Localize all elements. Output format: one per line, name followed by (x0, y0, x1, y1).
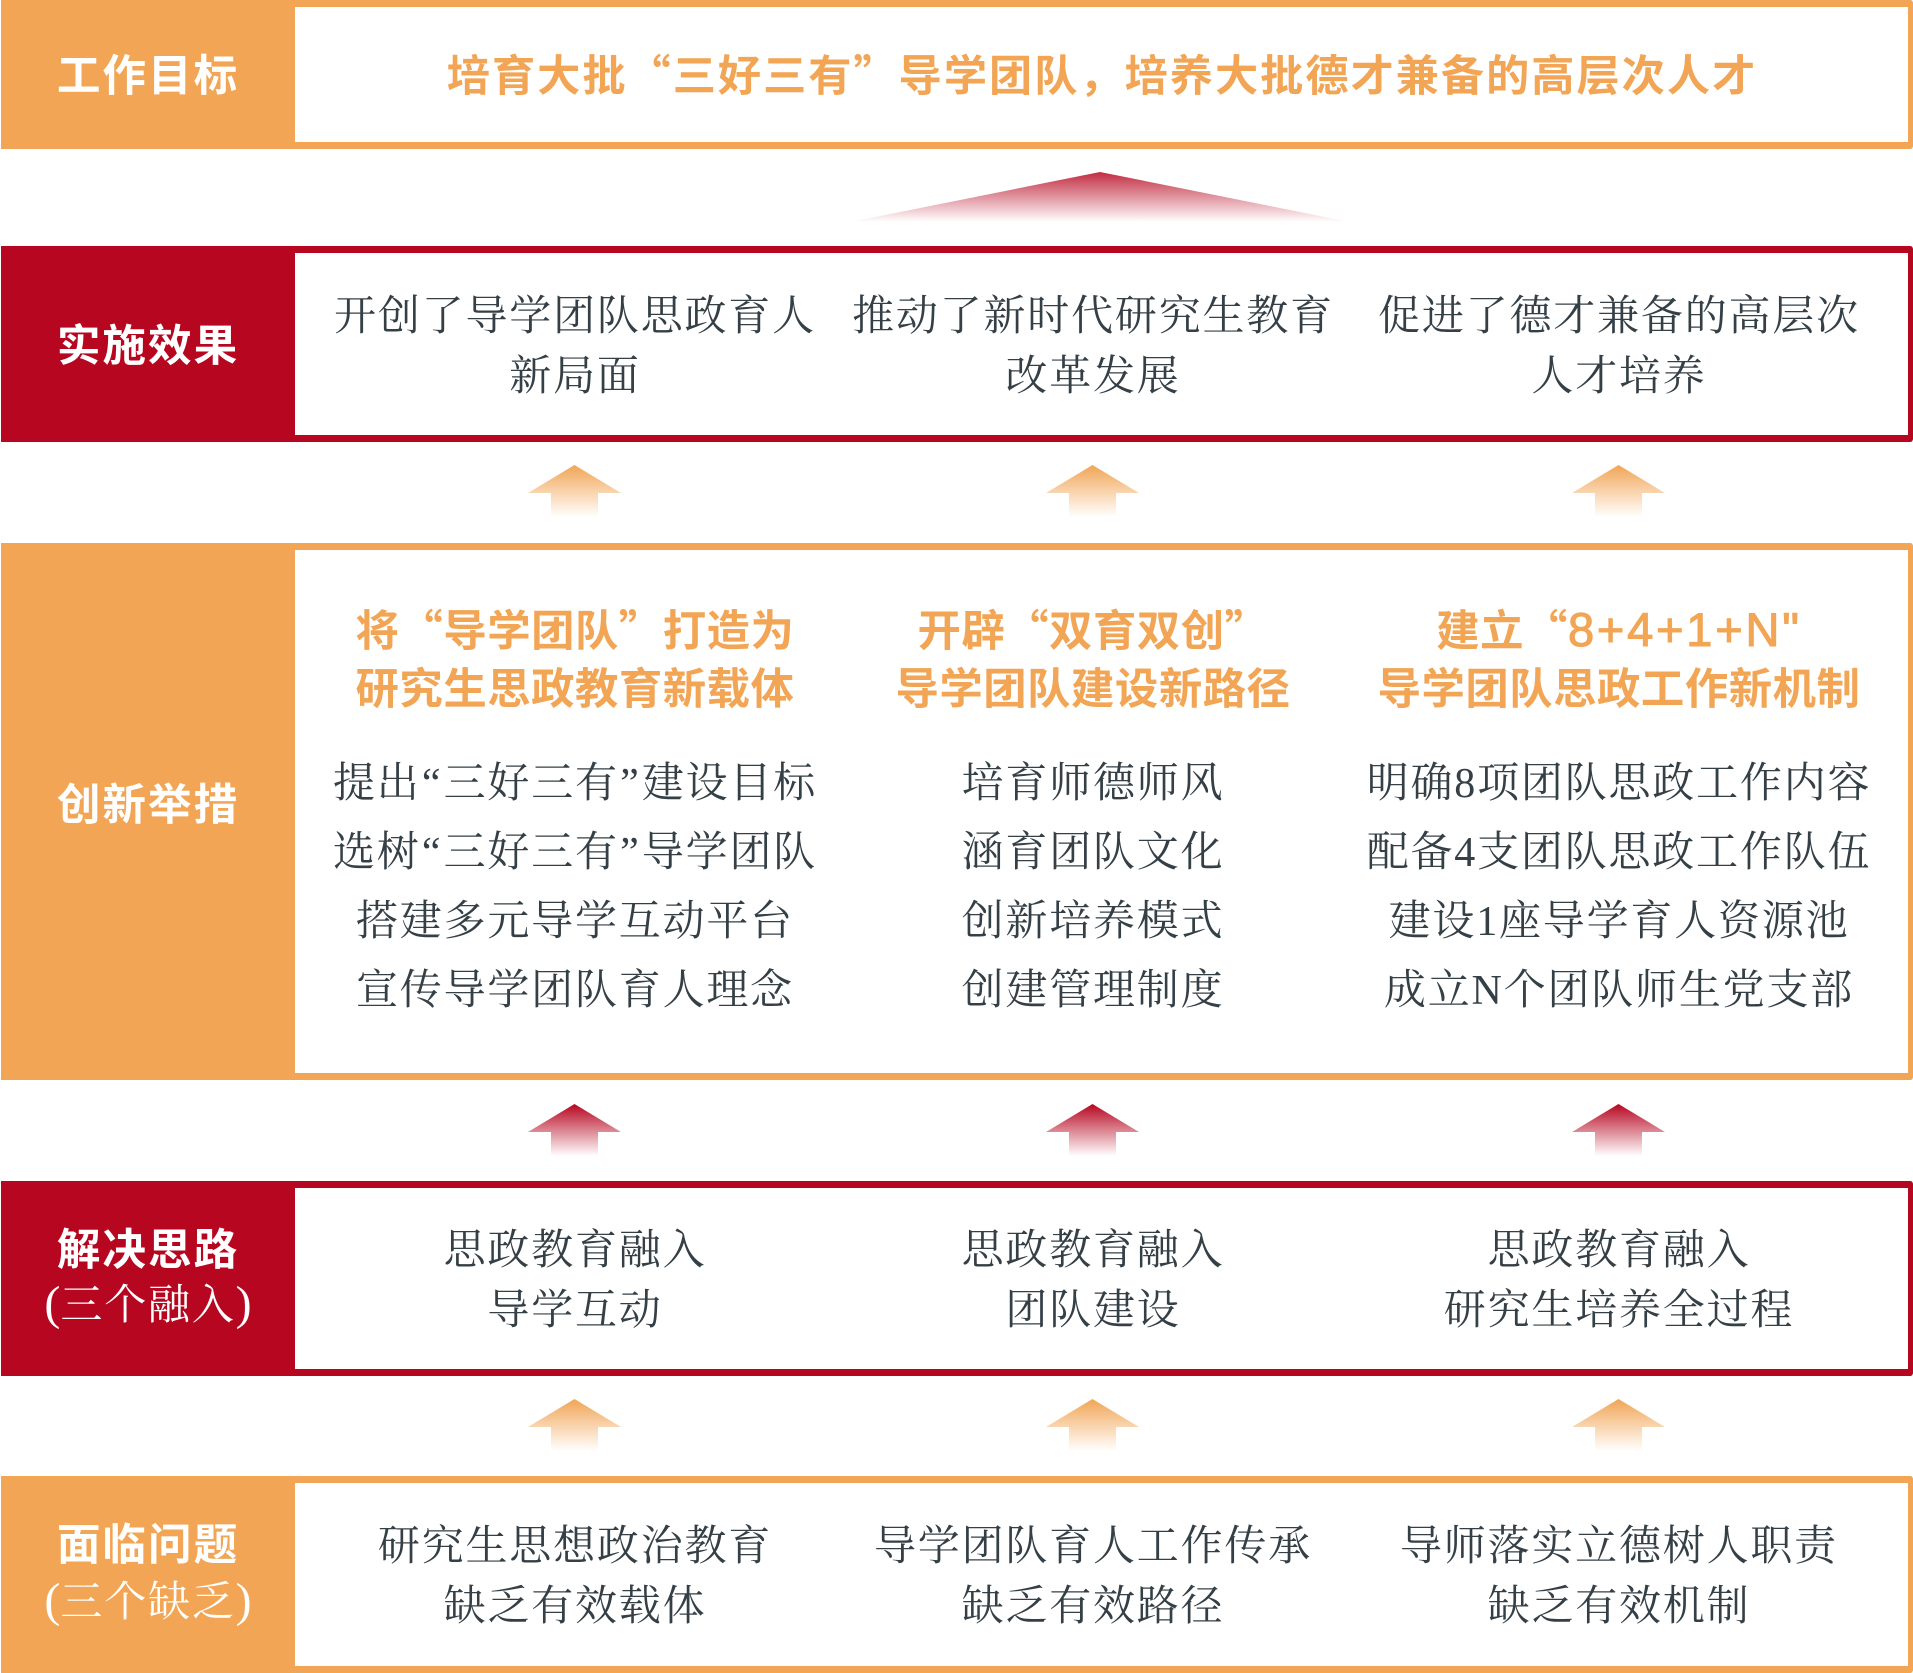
arrow: red column 1 (528, 1104, 621, 1154)
arrow: orange lower column 3 (1572, 1399, 1665, 1448)
column 3 list: 成立N个团队师生党支部 (1384, 968, 1854, 1014)
integration 1: 导学互动 (487, 1288, 663, 1334)
column 2 heading: 导学团队建设新路径 (895, 655, 1290, 717)
column 2 list: 创建管理制度 (962, 968, 1224, 1014)
result 3 (1378, 294, 1860, 400)
label: results: 实施效果 (57, 310, 239, 374)
arrow: orange column 3 (1572, 465, 1665, 514)
panel: results (1, 246, 1913, 442)
problem 1: 缺乏有效载体 (444, 1584, 706, 1630)
column 3 heading: 建立“8+4+1+N" (1436, 597, 1802, 659)
arrow: red column 3 (1572, 1104, 1665, 1154)
column 3 heading (1378, 597, 1860, 717)
column 1 list: 宣传导学团队育人理念 (356, 968, 794, 1014)
arrow: red column 2 (1046, 1104, 1139, 1154)
column 1 list: 提出“三好三有”建设目标 (333, 761, 817, 807)
integration 3: 思政教育融入 (1488, 1228, 1750, 1274)
problem 1 (378, 1524, 772, 1630)
arrow: orange lower column 2 (1046, 1399, 1139, 1448)
result 1 (334, 294, 816, 400)
problem 3: 缺乏有效机制 (1488, 1584, 1750, 1630)
integration 1: 思政教育融入 (444, 1228, 706, 1274)
column 1 list: 选树“三好三有”导学团队 (333, 830, 817, 876)
label: work goal: 工作目标 (57, 40, 239, 104)
result 2: 改革发展 (1005, 354, 1181, 400)
result 1: 新局面 (509, 354, 641, 400)
column 1 heading (356, 597, 794, 717)
column 2 list: 涵育团队文化 (962, 830, 1224, 876)
label: measures: 创新举措 (57, 769, 239, 833)
result 3: 人才培养 (1531, 354, 1707, 400)
problem 2: 缺乏有效路径 (962, 1584, 1224, 1630)
problem 3 (1400, 1524, 1838, 1630)
arrow: orange column 2 (1046, 465, 1139, 514)
integration 1 (444, 1228, 706, 1334)
column 3 list: 建设1座导学育人资源池 (1389, 899, 1849, 945)
panel: solution approach (1, 1181, 1913, 1376)
column 3 list (1367, 761, 1871, 1014)
column 1 heading: 将“导学团队”打造为 (356, 597, 794, 659)
panel: problems faced (1, 1476, 1913, 1673)
column 2 heading: 开辟“双育双创” (917, 597, 1269, 659)
column 1 list: 搭建多元导学互动平台 (356, 899, 794, 945)
column 3 heading: 导学团队思政工作新机制 (1378, 655, 1860, 717)
column 3 list: 配备4支团队思政工作队伍 (1367, 830, 1871, 876)
label: problems faced: 面临问题 (57, 1509, 239, 1573)
panel: work goal (1, 0, 1913, 149)
arrow: orange column 1 (528, 465, 621, 514)
integration 2: 团队建设 (1005, 1288, 1181, 1334)
arrow: large red up arrow (862, 172, 1338, 220)
sub label: three lacks: (三个缺乏) (44, 1574, 252, 1627)
problem 3: 导师落实立德树人职责 (1400, 1524, 1838, 1570)
integration 2 (962, 1228, 1224, 1334)
integration 2: 思政教育融入 (962, 1228, 1224, 1274)
result 2 (852, 294, 1334, 400)
goal statement: 培育大批“三好三有”导学团队，培养大批德才兼备的高层次人才 (447, 42, 1757, 104)
result 2: 推动了新时代研究生教育 (852, 294, 1334, 340)
sub label: three integrations: (三个融入) (44, 1277, 252, 1330)
problem 2: 导学团队育人工作传承 (874, 1524, 1312, 1570)
problem 2 (874, 1524, 1312, 1630)
arrow: orange lower column 1 (528, 1399, 621, 1448)
integration 3: 研究生培养全过程 (1444, 1288, 1794, 1334)
column 2 heading (895, 597, 1290, 717)
integration 3 (1444, 1228, 1794, 1334)
label: solution approach: 解决思路 (57, 1214, 239, 1278)
column 2 list: 培育师德师风 (962, 761, 1224, 807)
result 1: 开创了导学团队思政育人 (334, 294, 816, 340)
panel: innovative measures (1, 543, 1913, 1080)
problem 1: 研究生思想政治教育 (378, 1524, 772, 1570)
column 1 heading: 研究生思政教育新载体 (356, 655, 794, 717)
column 1 list (333, 761, 817, 1014)
column 2 list: 创新培养模式 (962, 899, 1224, 945)
column 2 list (962, 761, 1224, 1014)
column 3 list: 明确8项团队思政工作内容 (1367, 761, 1871, 807)
result 3: 促进了德才兼备的高层次 (1378, 294, 1860, 340)
